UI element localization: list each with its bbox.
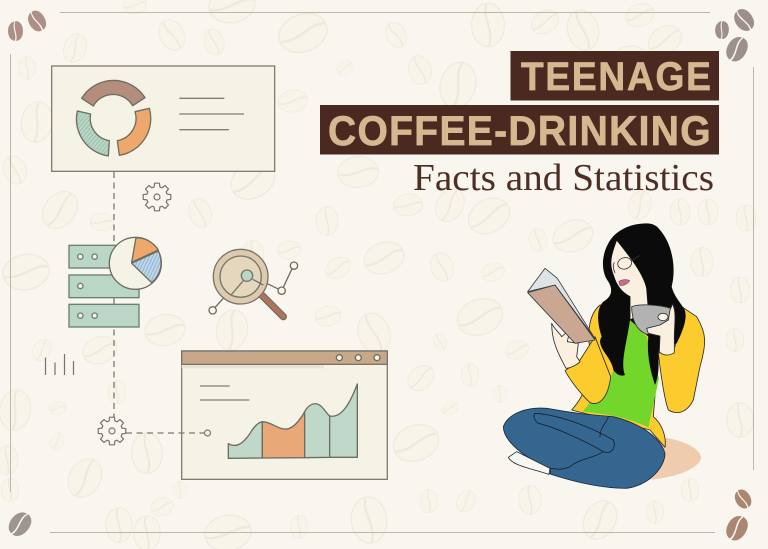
window title bar [182, 351, 387, 364]
icon: gear upper [143, 183, 171, 211]
icon: corner beans top left [8, 8, 49, 41]
gear hub lower [109, 428, 115, 434]
left sleeve [565, 337, 611, 404]
coffee cup [632, 305, 671, 334]
area chart [228, 384, 357, 458]
title: coffee-drinking: COFFEE-DRINKING [328, 108, 711, 154]
jeans seams [534, 413, 614, 469]
left hand behind book [552, 323, 580, 368]
icon: corner bean bottom left [4, 508, 36, 540]
floor shadow [513, 438, 701, 479]
glasses [613, 256, 639, 273]
panel: donut chart card [52, 66, 275, 171]
legend lines [179, 98, 244, 130]
lips [619, 280, 630, 285]
icon: gear lower [98, 417, 126, 445]
face and neck [611, 240, 648, 320]
connector dashed vertical line [113, 172, 115, 418]
panel: area chart window [182, 351, 387, 479]
book cover [528, 285, 595, 343]
panel: server stack with pie chart [69, 237, 161, 327]
jeans [503, 408, 665, 488]
connector dashed horizontal line [126, 432, 204, 434]
right hand [647, 304, 675, 355]
donut chart [76, 80, 151, 156]
hair [598, 223, 686, 385]
white sock [508, 452, 550, 474]
jacket back [572, 305, 680, 447]
icon: magnifier with network nodes [209, 249, 298, 317]
subtitle: Facts and Statistics [413, 157, 714, 199]
green shirt [583, 320, 659, 427]
icon: corner beans top right [714, 5, 758, 65]
right sleeve [658, 307, 705, 413]
illustration: woman reading with coffee [503, 223, 705, 488]
pie chart [109, 237, 161, 289]
icon: corner beans bottom right [722, 487, 754, 544]
gear hub upper [154, 194, 160, 200]
text lines [200, 386, 249, 400]
book pages [528, 268, 595, 339]
connector end node [204, 430, 210, 436]
tick marks [46, 354, 74, 375]
title: teenage: TEENAGE [521, 55, 711, 99]
